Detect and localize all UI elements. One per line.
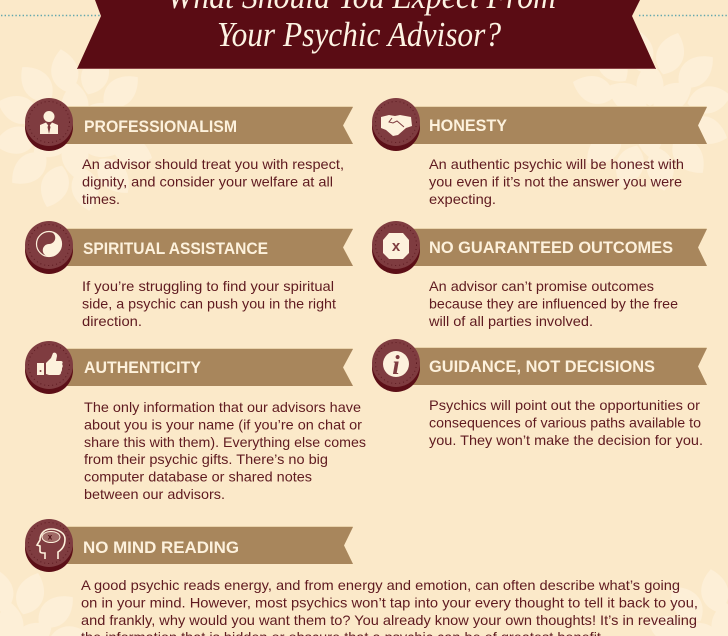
- dotted line: left: [1, 14, 100, 16]
- background flower: top left: [0, 47, 158, 213]
- panel: professionalism: [25, 98, 353, 207]
- icon: thumbs up: [25, 341, 73, 394]
- body text: computer database or shared notes: [84, 468, 312, 484]
- panel: honesty: [372, 98, 707, 207]
- body text: direction.: [82, 313, 142, 329]
- background flower: bottom right: [642, 567, 728, 636]
- dotted line: right: [639, 14, 728, 16]
- body text: If you’re struggling to find your spiritual: [82, 278, 334, 294]
- ribbon: [60, 106, 353, 144]
- icon: info: i: [392, 350, 400, 380]
- background flower: bottom left: [0, 567, 93, 636]
- body text: on in your mind. However, most psychics won’t tap into your every thought to tell it back to you,: [81, 594, 698, 610]
- panel: no mind reading: [25, 519, 698, 636]
- icon: yin yang: [25, 221, 73, 274]
- body text: consequences of various paths available to: [429, 414, 701, 430]
- body text: times.: [82, 191, 120, 207]
- heading: HONESTY: [429, 117, 507, 135]
- panel: authenticity: [25, 341, 366, 502]
- heading: PROFESSIONALISM: [84, 118, 237, 136]
- title: Your Psychic Advisor?: [217, 15, 501, 54]
- body text: An advisor can’t promise outcomes: [429, 278, 654, 294]
- ribbon: [60, 228, 353, 266]
- ribbon: [60, 526, 353, 564]
- title banner: [77, 0, 656, 69]
- body text: Psychics will point out the opportunities or: [429, 397, 700, 413]
- panel: no guaranteed outcomes: [372, 221, 707, 329]
- panel: spiritual assistance: [25, 221, 353, 329]
- icon: stop sign: [372, 221, 420, 274]
- icon: stop sign: x: [392, 238, 401, 255]
- body text: [81, 577, 698, 636]
- ribbon: [405, 347, 707, 385]
- body text: A good psychic reads energy, and from energy and emotion, can often describe what’s going: [81, 577, 680, 593]
- body text: from their psychic gifts. There’s no big: [84, 451, 328, 467]
- body text: side, a psychic can push you in the right: [82, 296, 336, 312]
- heading: NO GUARANTEED OUTCOMES: [429, 239, 673, 257]
- body text: [428, 278, 678, 329]
- body text: The only information that our advisors have: [84, 399, 361, 415]
- heading: GUIDANCE, NOT DECISIONS: [429, 358, 655, 376]
- icon: info: [372, 339, 420, 392]
- body text: An advisor should treat you with respect,: [82, 156, 344, 172]
- body text: [82, 278, 336, 329]
- icon: head: [25, 519, 73, 572]
- body text: will of all parties involved.: [428, 313, 593, 329]
- body text: between our advisors.: [84, 486, 225, 502]
- heading: NO MIND READING: [83, 539, 239, 557]
- background flower: top right: [567, 27, 728, 193]
- body text: An authentic psychic will be honest with: [429, 156, 684, 172]
- body text: [429, 156, 684, 207]
- body text: you. They won’t make the decision for you.: [429, 432, 703, 448]
- body text: about you is your name (if you’re on chat or: [84, 416, 362, 432]
- body text: [82, 156, 344, 207]
- body text: share this with them). Everything else comes: [84, 434, 366, 450]
- heading: SPIRITUAL ASSISTANCE: [83, 240, 268, 258]
- ribbon: [60, 348, 353, 386]
- ribbon: [405, 228, 707, 266]
- panel: guidance, not decisions: [372, 339, 707, 448]
- body text: dignity, and consider your welfare at all: [82, 174, 333, 190]
- title: [167, 0, 556, 54]
- icon: head: x: [48, 532, 53, 542]
- ribbon: [405, 106, 707, 144]
- body text: expecting.: [429, 191, 496, 207]
- body text: [429, 397, 703, 448]
- body text: you even if it’s not the answer you were: [429, 174, 682, 190]
- body text: and frankly, why would you want them to? You already know your own thoughts! It’s in revealing: [81, 612, 697, 628]
- icon: businessman: [25, 98, 73, 151]
- icon: handshake: [372, 98, 420, 151]
- body text: because they are influenced by the free: [429, 296, 678, 312]
- heading: AUTHENTICITY: [84, 359, 201, 377]
- body text: [84, 399, 366, 502]
